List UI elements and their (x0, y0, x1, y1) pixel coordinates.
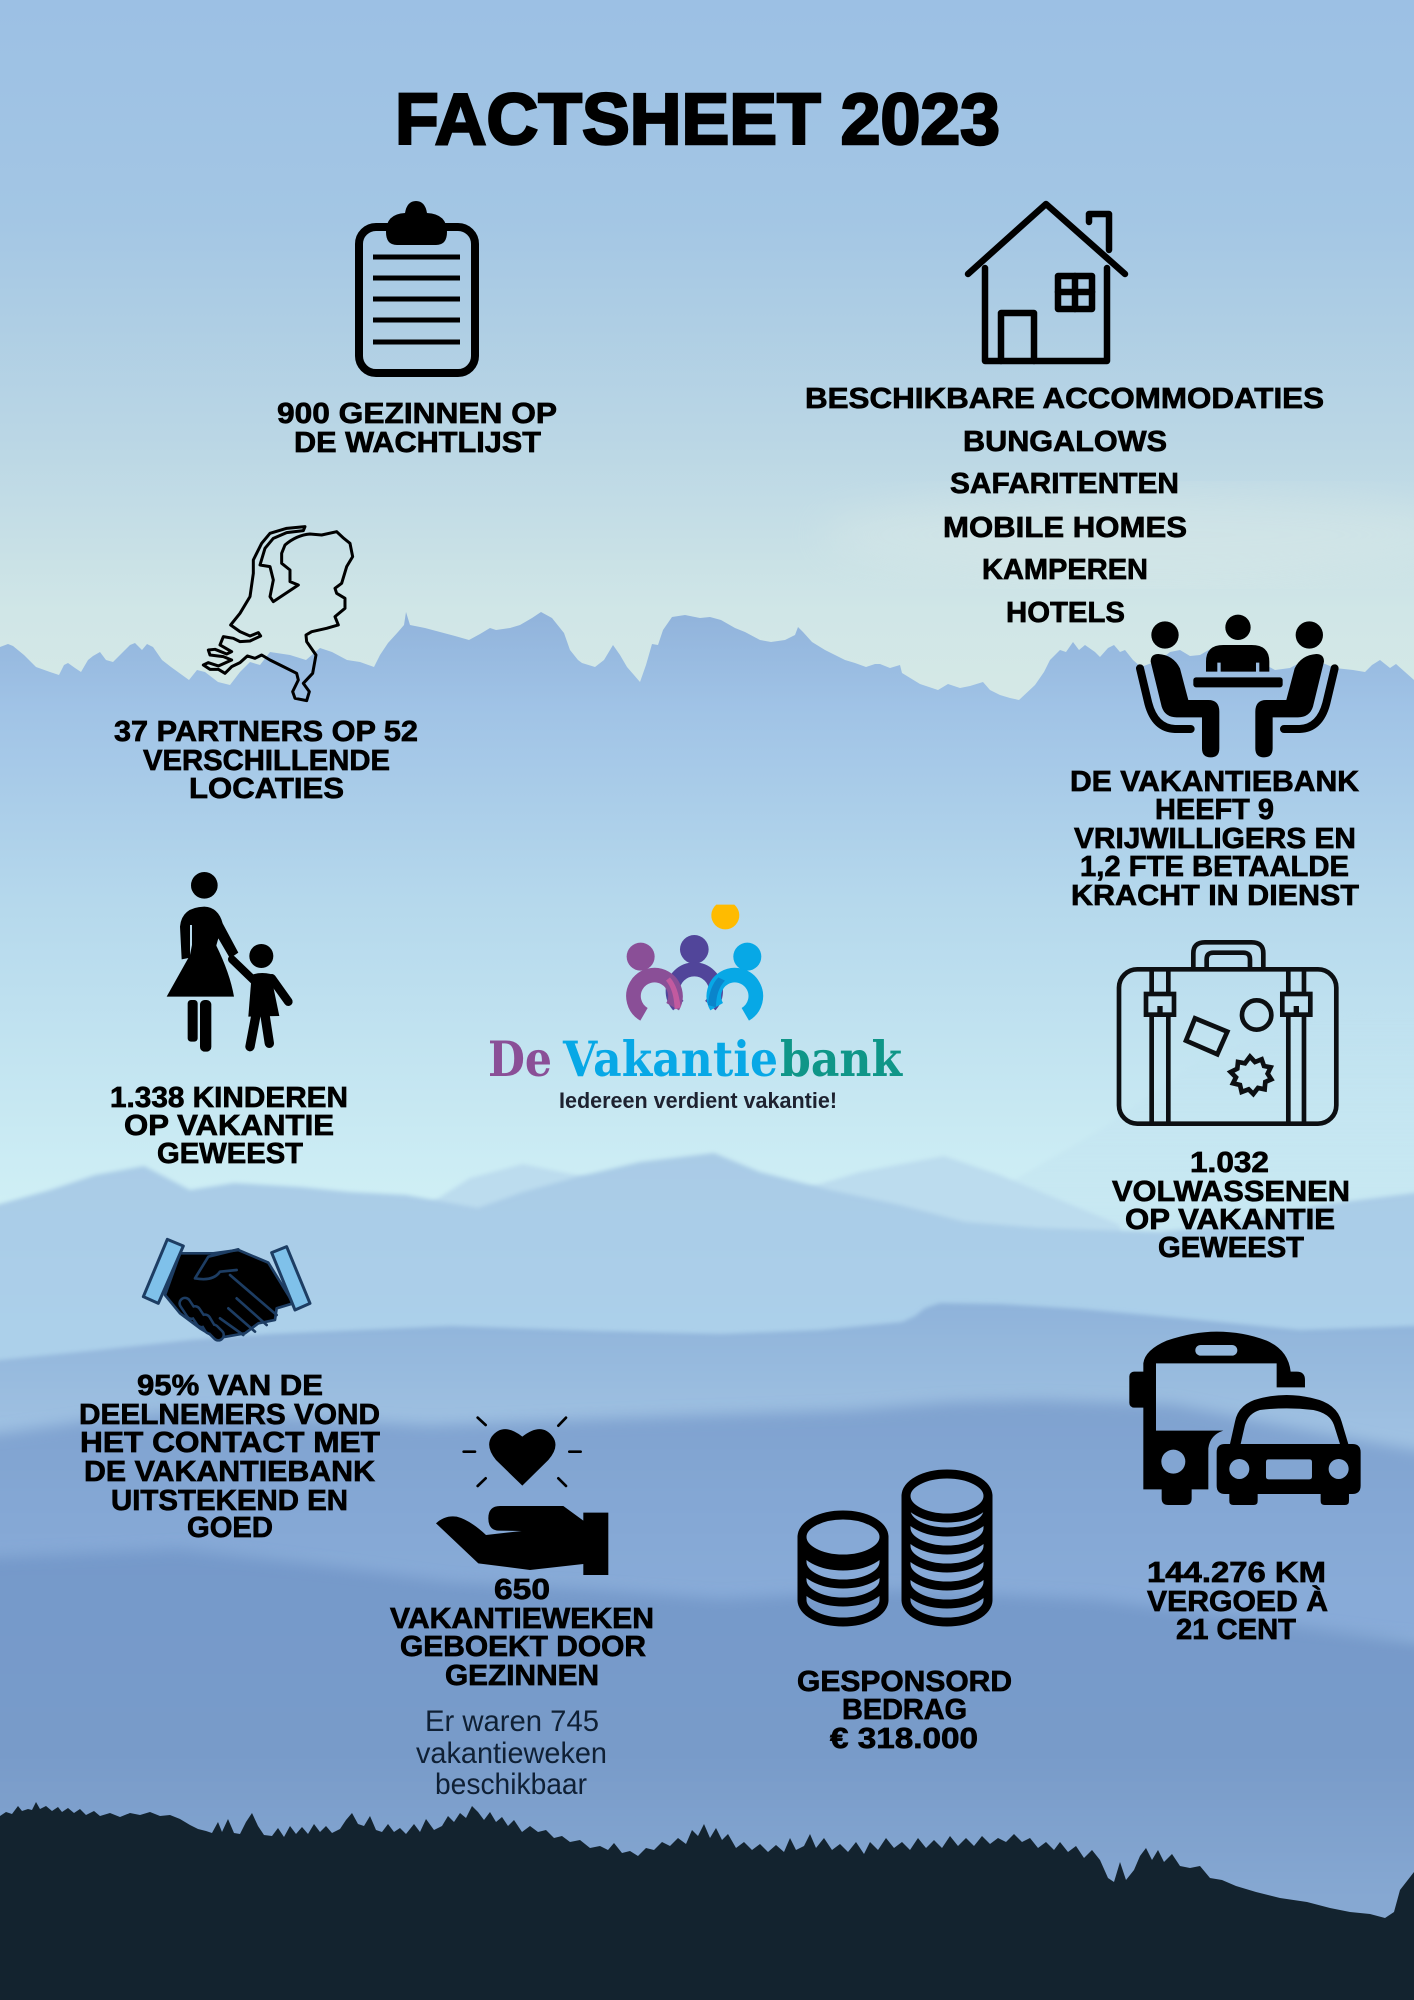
text: gesponsord bedrag: GESPONSORD (797, 1666, 1012, 1698)
text: wachtlijst: 900 GEZINNEN OP (277, 398, 557, 430)
logo wordmark: bank (780, 1030, 903, 1088)
text: beschikbare accommodaties: BUNGALOWS (963, 426, 1167, 458)
text: vrijwilligers: KRACHT IN DIENST (1071, 880, 1359, 912)
text: volwassenen: OP VAKANTIE (1125, 1204, 1335, 1236)
title: FACTSHEET 2023 (395, 80, 1000, 160)
text: kilometers (1147, 1557, 1328, 1646)
text: beschikbare accommodaties: MOBILE HOMES (943, 512, 1187, 544)
text: tevredenheid: 95% VAN DE (137, 1370, 323, 1402)
text: vakantieweken: 650 (494, 1574, 550, 1606)
text: volwassenen: VOLWASSENEN (1112, 1176, 1350, 1208)
text: vrijwilligers: 1,2 FTE BETAALDE (1080, 851, 1349, 883)
text: vrijwilligers (1070, 766, 1359, 912)
icon: clipboard (359, 201, 475, 373)
text: vrijwilligers: DE VAKANTIEBANK (1070, 766, 1359, 798)
logo: De Vakantiebank (627, 905, 761, 1014)
icon: map of the Netherlands (203, 527, 353, 701)
text: wachtlijst: DE WACHTLIJST (294, 427, 541, 459)
icon: bus and car (1129, 1332, 1361, 1505)
text: kilometers: 144.276 KM (1147, 1557, 1326, 1589)
background: dark treeline silhouette (0, 1802, 1414, 2000)
icon: stacks of coins (802, 1474, 988, 1622)
icon: house (968, 204, 1125, 361)
text: vakantieweken: GEZINNEN (445, 1660, 599, 1692)
text: gesponsord bedrag: BEDRAG (842, 1694, 967, 1726)
text: tevredenheid: GOED (187, 1512, 273, 1544)
icon: mother and child (167, 872, 288, 1052)
text: partners: LOCATIES (189, 773, 344, 805)
logo tagline: Iedereen verdient vakantie! (559, 1088, 837, 1113)
text: beschikbare accommodaties: SAFARITENTEN (950, 468, 1179, 500)
text: beschikbare vakantieweken (416, 1705, 607, 1801)
text: volwassenen (1112, 1147, 1350, 1264)
text: tevredenheid: DE VAKANTIEBANK (84, 1456, 375, 1488)
text: vrijwilligers: HEEFT 9 (1155, 794, 1274, 826)
text: vakantieweken: VAKANTIEWEKEN (390, 1603, 654, 1635)
text: gesponsord bedrag (797, 1666, 1012, 1755)
logo wordmark (488, 1030, 903, 1088)
text: beschikbare vakantieweken: vakantieweken (416, 1737, 607, 1770)
text: kilometers: VERGOED À (1147, 1584, 1328, 1618)
text: beschikbare vakantieweken: beschikbaar (435, 1768, 587, 1801)
icon: people meeting at a table (1140, 615, 1335, 757)
text: kinderen: OP VAKANTIE (124, 1110, 334, 1142)
text: kinderen: GEWEEST (157, 1138, 303, 1170)
text: tevredenheid: HET CONTACT MET (80, 1427, 380, 1459)
text: kinderen (110, 1082, 348, 1170)
text: tevredenheid: UITSTEKEND EN (111, 1485, 348, 1517)
text: beschikbare vakantieweken: Er waren 745 (425, 1705, 599, 1738)
icon: hand holding heart (436, 1418, 608, 1575)
icon: suitcase (1119, 942, 1336, 1124)
text: beschikbare accommodaties: KAMPEREN (982, 554, 1148, 586)
text: kinderen: 1.338 KINDEREN (110, 1082, 348, 1114)
text: vrijwilligers: VRIJWILLIGERS EN (1074, 823, 1356, 855)
text: beschikbare accommodaties: HOTELS (1006, 597, 1125, 629)
text: volwassenen: 1.032 (1190, 1147, 1269, 1179)
text: beschikbare accommodaties (805, 383, 1324, 629)
text: wachtlijst (277, 398, 557, 459)
text: vakantieweken: GEBOEKT DOOR (400, 1631, 646, 1663)
text: volwassenen: GEWEEST (1158, 1232, 1304, 1264)
text: partners (114, 716, 418, 805)
icon: handshake (143, 1239, 310, 1338)
text: partners: VERSCHILLENDE (143, 745, 390, 777)
text: beschikbare accommodaties: BESCHIKBARE ACCOMMODATIES (805, 383, 1324, 415)
logo wordmark: De (488, 1030, 552, 1088)
logo wordmark: Vakantie (562, 1030, 778, 1088)
text: tevredenheid (79, 1370, 380, 1544)
text: partners: 37 PARTNERS OP 52 (114, 716, 418, 748)
text: tevredenheid: DEELNEMERS VOND (79, 1399, 380, 1431)
text: vakantieweken (390, 1574, 654, 1692)
text: kilometers: 21 CENT (1176, 1614, 1296, 1646)
text: gesponsord bedrag: € 318.000 (830, 1723, 978, 1755)
